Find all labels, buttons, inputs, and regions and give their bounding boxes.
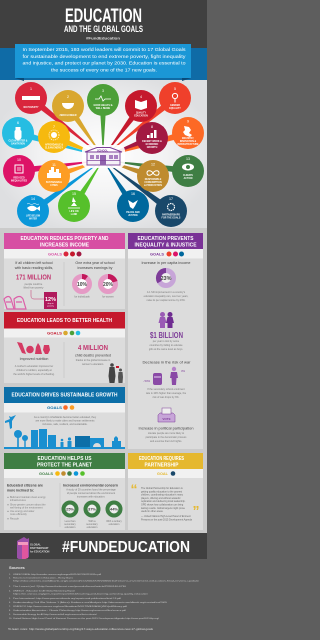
text: cost per year: countries by failing to educate bbox=[149, 344, 183, 347]
source list: 3. bbox=[9, 586, 11, 588]
donut: 20%: 20% bbox=[103, 282, 114, 288]
quote text: GPE shows how collaboration can bring bbox=[141, 504, 184, 506]
text: enrolment bbox=[146, 388, 187, 399]
donut: 23%: 23% bbox=[160, 276, 172, 282]
text: earnings: increases earnings by bbox=[78, 266, 113, 270]
donut: 37% bbox=[86, 502, 99, 529]
goal 9: INDUSTRY, bbox=[182, 138, 194, 140]
donut: 10%: for individuals bbox=[74, 296, 90, 298]
goal 13: CLIMATE bbox=[183, 174, 193, 177]
list: actions bbox=[7, 496, 46, 520]
text: deaths detail: women's education. bbox=[82, 363, 104, 366]
text: inequality: raise its per capita income by 23%. bbox=[147, 299, 186, 302]
stat: 4 million: 4 MILLION bbox=[78, 343, 108, 352]
goal 13 bbox=[172, 155, 204, 187]
goal 7: CLEAN ENERGY bbox=[45, 146, 64, 150]
goal 5: EQUALITY bbox=[169, 107, 181, 110]
donut: 23% bbox=[156, 268, 174, 286]
donut: 44%: 44% bbox=[110, 506, 118, 512]
goal 17: PARTNERSHIPS bbox=[162, 214, 180, 216]
stat box: 12%: poverty bbox=[47, 304, 54, 308]
icon: school bbox=[82, 145, 125, 168]
text: political participation: Increase in political participation bbox=[138, 426, 194, 430]
source list: Understanding Civil War Volume 1 (Africa): Evidence and Analysis http://documents.worldbank.org/curated/en/2005 bbox=[13, 601, 168, 604]
goal 3 bbox=[87, 84, 119, 116]
goal 14: WATER bbox=[29, 218, 37, 220]
sources panel bbox=[0, 559, 207, 640]
heading: INCREASES INCOME bbox=[40, 242, 90, 248]
footer band bbox=[0, 533, 207, 559]
goal 6: 6 bbox=[17, 121, 19, 125]
goal 8: ECONOMIC bbox=[146, 144, 159, 146]
source list: United Nations High-Level Panel of Eminent Persons on the post-2015 Development Agenda http://www.post2015hlp.org/ bbox=[13, 617, 160, 620]
icon: two girls bbox=[158, 312, 174, 328]
text: nutrition detail: the world's higher levels of schooling. bbox=[13, 373, 55, 376]
goal 14 bbox=[17, 195, 49, 227]
source list: Returns to Investment in Education - Henry Barro bbox=[13, 576, 74, 580]
heading: EDUCATION PREVENTS bbox=[138, 236, 194, 242]
connector bbox=[31, 290, 44, 299]
attribution: Persons on the post-2015 Development Agenda bbox=[141, 518, 193, 521]
text: growth detail: inclusive, safe, resilient, and sustainable. bbox=[42, 423, 88, 426]
goal 4: 4 bbox=[140, 95, 142, 99]
source list: The Lancet (vol. 2)http://www.thelancet.com/journals/lancet/article/PIIS0140-6736 bbox=[13, 585, 127, 588]
source list: 8. bbox=[9, 610, 11, 612]
goal 10: INEQUALITIES bbox=[11, 180, 28, 182]
text: reading skills bbox=[15, 261, 53, 270]
attribution: — United Nations High-Level Panel of Eminent bbox=[141, 515, 191, 518]
goal 12: & PRODUCTION bbox=[144, 185, 162, 187]
donut: 10%: 10% bbox=[77, 282, 88, 288]
list: actions: Show greater concern about the bbox=[10, 504, 46, 506]
text: concern detail: increases with education: bbox=[77, 496, 105, 498]
goal 16: 16 bbox=[131, 192, 135, 196]
hashtag: #FUNDEDUCATION bbox=[62, 539, 190, 556]
list: actions: Recycle bbox=[10, 518, 20, 520]
quote text: getting quality education to the poorest bbox=[141, 490, 182, 493]
stat box: 12%: 12% bbox=[45, 297, 56, 303]
stat: 171 million: 171 MILLION bbox=[16, 274, 51, 282]
icon: opening quote: “ bbox=[130, 481, 138, 497]
divider bbox=[63, 342, 65, 378]
goal 15 bbox=[58, 190, 90, 222]
source list: 4. bbox=[9, 590, 11, 592]
icon: vote box: VOTE bbox=[162, 417, 171, 421]
heading bbox=[128, 233, 203, 249]
intro callout: the success of every one of the 17 new goals. bbox=[51, 67, 157, 72]
goal 17: 17 bbox=[169, 197, 173, 201]
goal rays bbox=[17, 95, 189, 214]
source list: https://en.unesco.org/gem-report/report/2014/teaching-and-learning-achieving-quality-education bbox=[13, 592, 149, 596]
goal 9: INNOVATION & bbox=[180, 140, 197, 143]
goal 17: FOR THE GOALS bbox=[162, 216, 181, 220]
quote text bbox=[141, 487, 186, 513]
panel: education drives sustainable growth bbox=[4, 387, 125, 449]
goal 13: 13 bbox=[186, 157, 190, 161]
donut: 25%: secondary bbox=[64, 523, 77, 526]
text: cost per year: girls at the same level as boys. bbox=[149, 348, 183, 351]
list: actions: infrastructures bbox=[10, 499, 27, 502]
text: educated citizens bbox=[7, 482, 44, 492]
source list: 6. bbox=[9, 602, 11, 604]
logo: global partnership for education: PARTNERSHIP bbox=[30, 546, 49, 550]
source list: UNESCO/EFA: http://unesdoc.unesco.org/images/0021/002190/219031e.pdf bbox=[13, 573, 102, 576]
text: child deaths: child deaths prevented bbox=[75, 354, 111, 358]
text: enrolment: rate is 10% higher than average, the bbox=[146, 392, 187, 395]
goal 8: DECENT WORK & bbox=[142, 141, 162, 143]
panel: education prevents inequality bbox=[128, 233, 203, 449]
text: growth detail: As a country's inhabitants become better educated, they bbox=[34, 416, 97, 419]
logo: global partnership for education: GLOBAL bbox=[30, 542, 41, 546]
heading: sources: Sources bbox=[9, 565, 26, 570]
goal 1: 1 bbox=[30, 87, 32, 91]
heading: EDUCATION REDUCES POVERTY AND bbox=[20, 236, 109, 242]
donut: 25%: 25% bbox=[66, 506, 74, 512]
caption: lifted from poverty bbox=[24, 283, 44, 290]
goal 12: CONSUMPTION bbox=[144, 182, 162, 184]
goal 9 bbox=[172, 117, 204, 149]
icon: city bbox=[4, 429, 125, 449]
text: deaths detail: thanks to the global increase in bbox=[76, 359, 111, 362]
goal 17 bbox=[155, 195, 187, 227]
heading: PARTNERSHIP bbox=[144, 462, 179, 468]
text: concern detail bbox=[66, 488, 116, 498]
goals row: GOALS bbox=[150, 252, 165, 256]
content background bbox=[0, 228, 207, 533]
quote text: lasting results. Global targets might prove bbox=[141, 507, 186, 510]
learn more link: To learn more: http://www.globalpartnership.org/blog/17-ways-education-influences-new-17-global-goals bbox=[8, 627, 154, 631]
heading: PROTECT THE PLANET bbox=[37, 462, 92, 468]
text: nutrition detail: children's nutrition, especially at bbox=[16, 369, 52, 372]
title: AND THE GLOBAL GOALS bbox=[64, 24, 143, 35]
quote text: players, offering and without wasteful bbox=[141, 497, 181, 500]
divider bbox=[59, 483, 61, 527]
icon: vote box bbox=[158, 408, 175, 422]
goal 13: ACTION bbox=[184, 177, 193, 180]
source list bbox=[9, 573, 201, 620]
icon: war risk: - 50% bbox=[143, 379, 151, 383]
goal 6: SANITATION bbox=[11, 142, 25, 146]
goal 5 bbox=[159, 82, 191, 114]
stat box: 12%: drop in bbox=[47, 303, 54, 305]
goal 7: AFFORDABLE & bbox=[45, 144, 63, 146]
donut: 25% bbox=[64, 502, 77, 529]
list: actions: Build and maintain clean energy bbox=[10, 496, 46, 499]
goal 10 bbox=[3, 155, 35, 187]
goal 2 bbox=[52, 90, 84, 122]
intro callout: and injustice, and protect our planet by 2030. Education is essential to bbox=[22, 61, 186, 66]
goal 9: INFRASTRUCTURE bbox=[177, 143, 199, 146]
logo: global partnership for education: for EDUCATION bbox=[30, 550, 50, 554]
icon: books bbox=[4, 296, 26, 309]
donut: 44% bbox=[106, 502, 122, 526]
stat box: 12% bbox=[44, 292, 57, 309]
goal 8 bbox=[136, 122, 168, 154]
goal 11: SUSTAINABLE bbox=[46, 181, 63, 184]
text: cost per year: per year is lost by some bbox=[153, 340, 180, 343]
goal 15: LIFE ON bbox=[69, 211, 79, 213]
goal 3: 3 bbox=[102, 89, 104, 93]
goal 8: GROWTH bbox=[147, 147, 158, 149]
intro callout: In September 2015, 193 world leaders will commit to 17 Global Goals bbox=[22, 47, 186, 52]
goal 7 bbox=[38, 121, 70, 153]
icon: closing quote: ” bbox=[192, 502, 200, 518]
text: reading skills: If all children left school bbox=[15, 261, 53, 265]
panel: education leads to better health bbox=[4, 312, 125, 383]
goal 12 bbox=[137, 160, 169, 192]
source list: 1. bbox=[9, 574, 11, 576]
text: inequality: education inequality can, over ten years, bbox=[144, 295, 189, 298]
goal 2: 2 bbox=[67, 95, 69, 99]
goal 14: 14 bbox=[31, 197, 35, 201]
goal 7: 7 bbox=[53, 125, 55, 129]
text: reading skills: with basic reading skills, bbox=[15, 266, 53, 270]
goal 14: LIFE BELOW bbox=[26, 216, 41, 218]
text: risk of war: Decrease in the risk of war bbox=[142, 360, 191, 364]
goal 2: ZERO HUNGER bbox=[60, 115, 77, 117]
text: participation detail: Literate people are more likely to bbox=[148, 432, 185, 435]
heading bbox=[128, 453, 203, 469]
heading: EDUCATION HELPS US bbox=[38, 456, 92, 462]
donut: 37%: education bbox=[87, 526, 98, 529]
text: growth detail bbox=[34, 416, 97, 426]
goal 3: GOOD HEALTH & bbox=[93, 104, 113, 107]
icon: war risk bbox=[143, 367, 186, 385]
goal 11: CITIES bbox=[50, 185, 58, 187]
caption: lifted from poverty: lifted from poverty bbox=[24, 286, 44, 290]
goal 5: 5 bbox=[174, 87, 176, 91]
source list: Pew International: http://www.pewsocialtrends.org/reports-and-publications/brief-13.pdf bbox=[13, 597, 122, 600]
goal 4 bbox=[125, 90, 157, 122]
goals row: GOALS bbox=[47, 406, 63, 410]
goal 8: 8 bbox=[151, 125, 153, 129]
goal 12: 12 bbox=[151, 162, 155, 166]
text: per capita income: Increase in per capita income bbox=[142, 261, 190, 265]
source list: 7. bbox=[9, 606, 11, 608]
heading: EDUCATION REQUIRES bbox=[139, 456, 185, 462]
source list: 9. bbox=[9, 614, 11, 616]
text: cost per year bbox=[149, 340, 183, 351]
list: actions: Use energy and water bbox=[10, 510, 35, 513]
text: participation detail bbox=[146, 432, 187, 443]
heading bbox=[4, 453, 125, 469]
heading: INEQUALITY & INJUSTICE bbox=[134, 242, 197, 248]
goal 4: QUALITY bbox=[136, 112, 147, 114]
goal 1 bbox=[15, 82, 47, 114]
text: concern detail: A study of 29 countries found the percentage bbox=[66, 488, 116, 492]
goal 16: JUSTICE bbox=[128, 215, 138, 217]
source list: UNESCO - Education for All Global Monitoring Report bbox=[13, 590, 76, 592]
list: actions: well-being of the environment bbox=[10, 506, 43, 510]
donut: 37%: 37% bbox=[88, 506, 96, 512]
goals row: GOALS bbox=[48, 252, 63, 256]
goal 4: EDUCATION bbox=[134, 114, 148, 118]
source list: 10. bbox=[9, 618, 12, 620]
source list: http://documents.worldbank.org/curated/en/2002/09/2065010/returns-investment-education-final-review-update bbox=[13, 580, 201, 582]
icon: mother and child bbox=[108, 363, 123, 383]
icon: war risk: 3% bbox=[181, 369, 186, 373]
text: participation detail: participate in the democratic process bbox=[146, 436, 187, 439]
donut: 20%: for women bbox=[102, 296, 114, 298]
donut: 25%: education bbox=[65, 526, 76, 529]
text: enrolment: If the secondary school enrolment bbox=[147, 388, 185, 391]
header band bbox=[0, 0, 207, 48]
goal 9: 9 bbox=[187, 120, 189, 124]
text: inequality bbox=[144, 291, 189, 302]
heading: EDUCATION LEADS TO BETTER HEALTH bbox=[17, 318, 112, 324]
panel: education requires partnership bbox=[128, 453, 203, 530]
blue ribbon band bbox=[0, 48, 207, 80]
text: enrolment: risk of war drops by 3%. bbox=[153, 396, 180, 399]
text: inequality: A 1 SD improvement in a country's bbox=[147, 291, 186, 294]
text: educated citizens: more inclined to: bbox=[7, 488, 34, 492]
text: earnings: One extra year of school bbox=[75, 261, 115, 265]
donut: 44%: education bbox=[109, 523, 120, 526]
text: earnings bbox=[75, 261, 115, 270]
goal 12: RESPONSIBLE bbox=[145, 179, 162, 181]
title: #FundEducation bbox=[86, 36, 121, 40]
list: actions: more efficiently bbox=[10, 513, 28, 516]
intro callout: for sustainable development to end extreme poverty, fight inequality bbox=[22, 54, 186, 59]
text: growth detail: are more likely to make cities and human settlements bbox=[36, 420, 95, 422]
logo: global partnership for education bbox=[17, 537, 50, 561]
stat: $1 billion: $1 BILLION bbox=[150, 331, 183, 340]
goal 6 bbox=[2, 117, 34, 149]
icon: plane bbox=[5, 415, 16, 429]
goal 10: REDUCED bbox=[13, 178, 25, 180]
caption: lifted from poverty: people could be bbox=[25, 283, 43, 286]
donut: 37%: secondary bbox=[86, 523, 99, 526]
source list: 5. bbox=[9, 598, 11, 600]
goal 11 bbox=[38, 160, 70, 192]
source list: 2. bbox=[9, 578, 11, 580]
goals row: GOALS bbox=[39, 472, 54, 476]
source list: Understandorx Association - Climate Philanthropy http://www.org/resources/files/source.pdf bbox=[13, 609, 127, 612]
text: nutrition detail: A mother's education improves her bbox=[15, 365, 53, 368]
quote text: useful in other areas. bbox=[141, 510, 164, 513]
goal 1: NO POVERTY bbox=[23, 107, 39, 109]
goals background bbox=[0, 80, 207, 228]
donut: 37%: With a bbox=[88, 520, 96, 523]
goals row bbox=[128, 249, 203, 258]
attribution bbox=[141, 515, 193, 521]
panel: education reduces poverty bbox=[4, 233, 125, 309]
text: deaths detail bbox=[76, 359, 111, 366]
icon: fruit bbox=[17, 342, 50, 354]
goal 16 bbox=[117, 190, 149, 222]
intro callout bbox=[15, 44, 191, 81]
title bbox=[64, 6, 143, 40]
quote text: children, coordinating education's many bbox=[141, 494, 184, 497]
panel: education helps us protect the planet bbox=[4, 453, 125, 530]
text: nutrition detail bbox=[13, 365, 55, 376]
text: educated citizens: Educated citizens are bbox=[7, 482, 44, 488]
heading: EDUCATION DRIVES SUSTAINABLE GROWTH bbox=[12, 392, 118, 398]
goal 5: GENDER bbox=[170, 105, 180, 107]
divider bbox=[63, 262, 65, 306]
icon: school: SCHOOL bbox=[97, 149, 108, 153]
goal 16: PEACE AND bbox=[126, 211, 140, 214]
source list: UNESCO http://www.unesco.org/new/fileadmin/MULTIMEDIA/HQ/ED/pdf/library.pdf bbox=[13, 605, 128, 608]
goal 10: 10 bbox=[17, 158, 21, 162]
donut: 20% bbox=[100, 274, 118, 298]
source list: Sustainable Energy for All http://www.se4all.org/resources/facts-sheets/ bbox=[13, 613, 98, 616]
heading bbox=[4, 233, 125, 249]
quote text: The Global Partnership for Education is bbox=[141, 487, 184, 490]
text: improved nutrition: Improved nutrition bbox=[20, 357, 48, 361]
goal 15: 15 bbox=[72, 192, 76, 196]
title: EDUCATION bbox=[65, 6, 142, 27]
donut: 44%: With a tertiary bbox=[106, 520, 122, 523]
goal 15: LAND bbox=[71, 213, 78, 216]
text: participation detail: and exercise their civil rights. bbox=[150, 440, 182, 443]
goal 3: WELL BEING bbox=[96, 108, 110, 110]
text: environmental concern: Increased environmental concern bbox=[63, 482, 118, 488]
goals row: GOAL bbox=[157, 472, 169, 476]
goals row: GOALS bbox=[47, 332, 63, 336]
donut: 25%: Less than bbox=[65, 520, 76, 523]
goal 11: 11 bbox=[52, 163, 56, 167]
donut: 10% bbox=[74, 274, 90, 298]
text: concern detail: of people concerned about the environment bbox=[67, 492, 115, 495]
goal 6: CLEAN WATER & bbox=[9, 140, 28, 142]
quote text: replication and delivering local leadership. bbox=[141, 500, 186, 503]
